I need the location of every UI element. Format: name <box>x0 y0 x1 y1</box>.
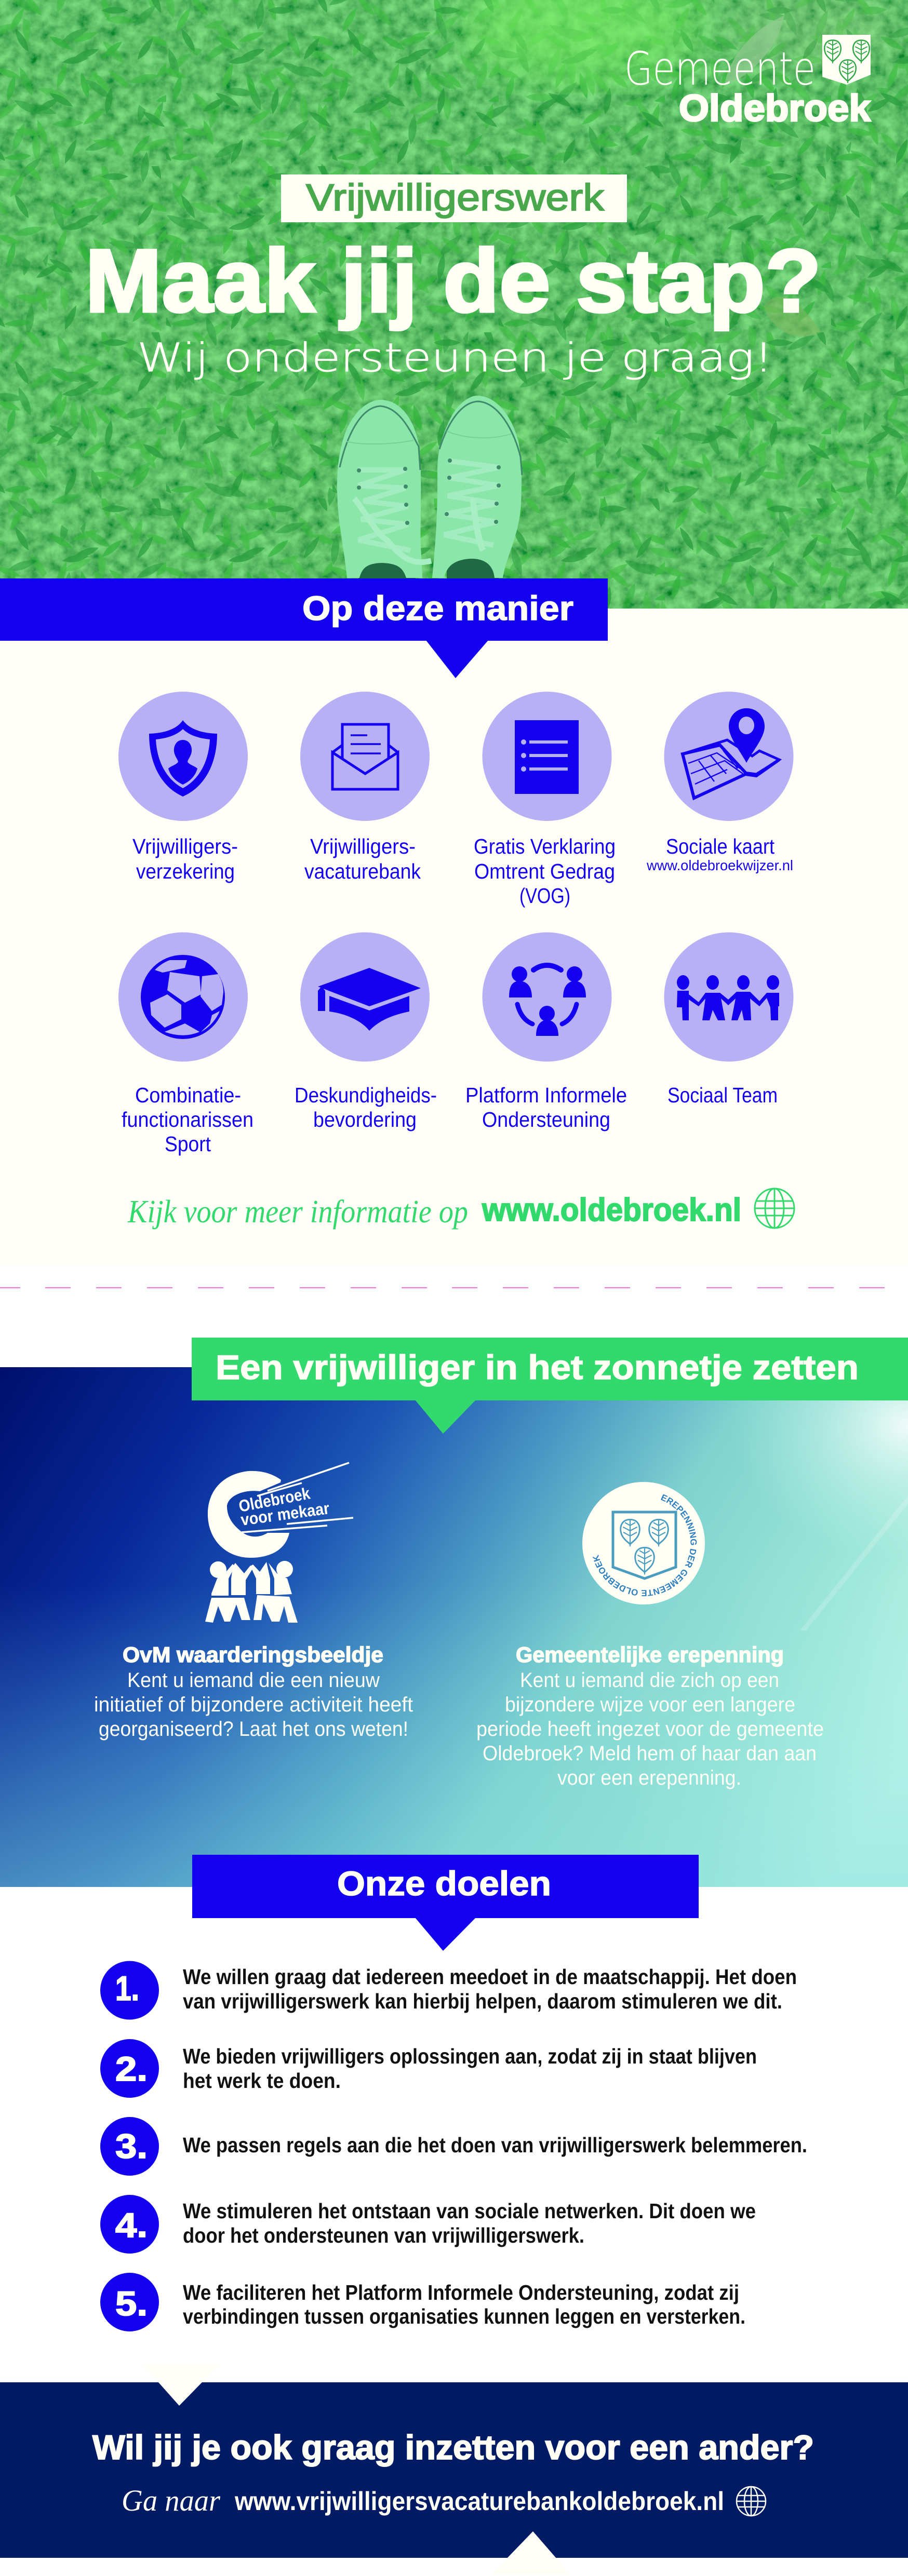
goal 1: 1. <box>115 1969 139 2007</box>
item: gratis VOG: (VOG) <box>519 884 570 908</box>
people holding up the logo <box>205 1561 298 1623</box>
banner: Op deze manier: Op deze manier <box>302 589 573 627</box>
logo wordmark: Gemeente <box>624 42 816 96</box>
bottom notch triangle <box>491 2531 570 2574</box>
icon: graduation cap <box>318 968 421 1031</box>
goal 2 <box>100 2039 757 2098</box>
goal 4: door het ondersteunen van vrijwilligerswerk. <box>183 2223 584 2247</box>
item: combinatiefunctionarissen sport: functionarissen <box>122 1108 253 1131</box>
item: combinatiefunctionarissen sport: Sport <box>165 1132 211 1156</box>
goal 5: We faciliteren het Platform Informele Ondersteuning, zodat zij <box>183 2281 739 2304</box>
goal 5: 5. <box>115 2284 148 2323</box>
goal 3 <box>100 2117 807 2176</box>
item: gratis VOG: Omtrent Gedrag <box>474 859 615 883</box>
panel: onze doelen <box>100 1855 807 2331</box>
icon: Oldebroek voor mekaar logo: Oldebroek <box>237 1483 312 1516</box>
banner: Een vrijwilliger in het zonnetje zetten: Een vrijwilliger in het zonnetje zetten <box>216 1348 859 1386</box>
icon: soccer ball <box>141 955 225 1039</box>
goal 3: 3. <box>115 2127 148 2165</box>
panel: op deze manier <box>0 578 908 1265</box>
logo: Gemeente Oldebroek <box>624 35 871 129</box>
goal 5: verbindingen tussen organisaties kunnen leggen en versterken. <box>183 2304 745 2328</box>
icon: document list <box>515 720 579 794</box>
goal 4: 4. <box>115 2206 148 2244</box>
footer link line: www.vrijwilligersvacaturebankoldebroek.nl <box>234 2487 724 2516</box>
banner: Onze doelen <box>192 1855 699 1951</box>
goal 2: We bieden vrijwilligers oplossingen aan, zodat zij in staat blijven <box>183 2044 757 2068</box>
logo wordmark: Oldebroek <box>679 88 871 129</box>
panel: footer call to action <box>0 2364 908 2574</box>
divider: dashed line <box>0 1287 885 1288</box>
text block: Gemeentelijke erepenning: Kent u iemand die zich op een <box>520 1669 779 1692</box>
banner: Op deze manier <box>0 578 608 678</box>
icon: shield <box>149 720 217 797</box>
icon: paper chain people <box>677 975 779 1020</box>
item: vrijwilligersvacaturebank: Vrijwilligers- <box>310 834 416 858</box>
text block: OvM waarderingsbeeldje <box>94 1642 413 1741</box>
item: sociale kaart: www.oldebroekwijzer.nl <box>646 857 793 873</box>
item: vrijwilligersverzekering: verzekering <box>136 859 235 883</box>
item: sociaal team <box>664 933 794 1107</box>
goal 3: We passen regels aan die het doen van vrijwilligerswerk belemmeren. <box>183 2133 807 2157</box>
icon: envelope with letter <box>332 724 398 789</box>
item: platform informele ondersteuning: Ondersteuning <box>482 1108 610 1131</box>
icon: Oldebroek voor mekaar logo: voor mekaar <box>239 1499 330 1529</box>
item: combinatiefunctionarissen sport <box>118 933 253 1156</box>
icon: map with pin <box>683 708 779 798</box>
item: deskundigheidsbevordering: Deskundigheids- <box>295 1083 437 1107</box>
goal 5 <box>100 2273 745 2331</box>
item: sociale kaart: Sociale kaart <box>666 834 775 858</box>
text block: OvM waarderingsbeeldje: Kent u iemand die een nieuw <box>127 1669 380 1692</box>
banner: Een vrijwilliger in het zonnetje zetten <box>192 1338 908 1434</box>
hero: grass photo background <box>0 0 908 609</box>
item: deskundigheidsbevordering: bevordering <box>313 1108 417 1131</box>
top notch triangle <box>142 2364 220 2406</box>
text block: OvM waarderingsbeeldje: georganiseerd? Laat het ons weten! <box>99 1718 408 1741</box>
goal 4 <box>100 2195 756 2254</box>
goal 4: We stimuleren het ontstaan van sociale netwerken. Dit doen we <box>183 2199 756 2223</box>
right sneaker <box>432 396 522 578</box>
goal 1: We willen graag dat iedereen meedoet in de maatschappij. Het doen <box>183 1965 797 1989</box>
call to action: meer informatie: www.oldebroek.nl <box>482 1192 741 1228</box>
goal 1 <box>100 1961 797 2020</box>
item: vrijwilligersvacaturebank <box>300 692 430 883</box>
item: deskundigheidsbevordering <box>295 933 437 1131</box>
footer link line: Ga naar <box>122 2484 220 2517</box>
text block: Gemeentelijke erepenning: periode heeft ingezet voor de gemeente <box>476 1718 824 1741</box>
call to action: meer informatie: Kijk voor meer informatie op <box>127 1194 468 1230</box>
banner: Onze doelen: Onze doelen <box>337 1864 551 1903</box>
text block: Gemeentelijke erepenning: voor een erepenning. <box>557 1766 741 1789</box>
tag: Vrijwilligerswerk <box>281 174 627 222</box>
icon: three people in a circle <box>509 965 586 1036</box>
item: combinatiefunctionarissen sport: Combinatie- <box>135 1083 241 1107</box>
subtitle: Wij ondersteunen je graag! <box>137 334 773 381</box>
item: sociale kaart <box>646 692 794 873</box>
item: platform informele ondersteuning <box>465 933 627 1131</box>
text block: OvM waarderingsbeeldje: initiatief of bijzondere activiteit heeft <box>94 1693 413 1716</box>
hero: pair of sneakers <box>337 396 522 578</box>
call to action: meer informatie <box>127 1189 794 1230</box>
item: vrijwilligersverzekering: Vrijwilligers- <box>132 834 238 858</box>
logo shield with leaves <box>822 35 871 85</box>
tag: Vrijwilligerswerk: Vrijwilligerswerk <box>306 177 605 219</box>
goal 1: van vrijwilligerswerk kan hierbij helpen, daarom stimuleren we dit. <box>183 1989 782 2013</box>
item: vrijwilligersvacaturebank: vacaturebank <box>304 859 421 883</box>
footer heading: Wil jij je ook graag inzetten voor een ander? <box>92 2428 814 2466</box>
goal 2: 2. <box>115 2049 148 2088</box>
left sneaker <box>337 400 431 578</box>
logo wordmark <box>624 42 871 129</box>
title: Maak jij de stap? <box>85 231 821 331</box>
item: vrijwilligersverzekering <box>118 692 248 883</box>
text block: Gemeentelijke erepenning <box>476 1642 824 1789</box>
item: gratis VOG <box>474 692 616 908</box>
sky background <box>0 1290 908 1887</box>
text block: Gemeentelijke erepenning: bijzondere wijze voor een langere <box>505 1693 795 1716</box>
text block: Gemeentelijke erepenning: Oldebroek? Meld hem of haar dan aan <box>483 1742 817 1765</box>
item: gratis VOG: Gratis Verklaring <box>474 834 616 858</box>
icon: erepenning medal: EREPENNING DER GEMEENTE OLDEBROEK <box>592 1494 697 1596</box>
icon: globe <box>737 2487 766 2516</box>
text block: OvM waarderingsbeeldje: OvM waarderingsbeeldje <box>123 1642 383 1667</box>
goal 2: het werk te doen. <box>183 2069 341 2093</box>
panel: een vrijwilliger in het zonnetje zetten <box>0 1338 908 1887</box>
icon: globe <box>755 1189 794 1228</box>
item: sociaal team: Sociaal Team <box>667 1083 778 1107</box>
text block: Gemeentelijke erepenning: Gemeentelijke erepenning <box>516 1642 784 1667</box>
item: platform informele ondersteuning: Platform Informele <box>465 1083 627 1107</box>
icon: Oldebroek voor mekaar logo <box>205 1463 353 1623</box>
